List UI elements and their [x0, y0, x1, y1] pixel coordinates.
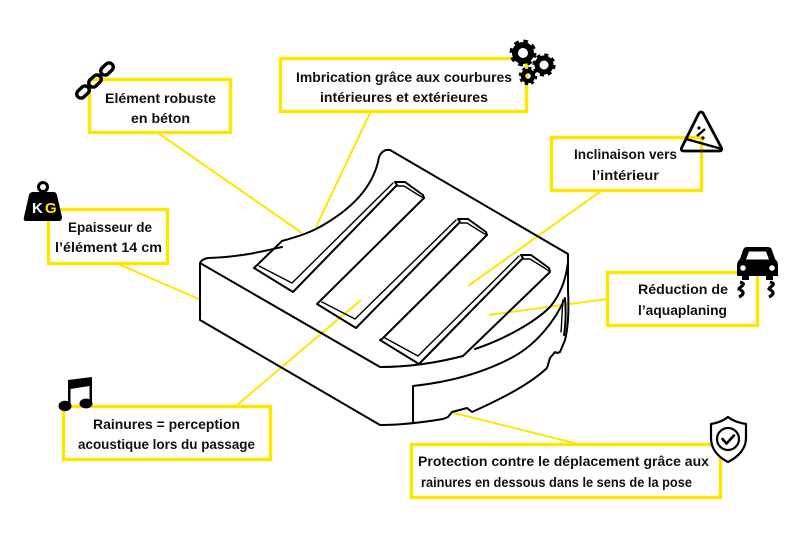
callout: reduction — [608, 272, 758, 326]
callout: imbrication: Imbrication grâce aux courbures — [296, 69, 512, 85]
connector lines — [118, 111, 607, 444]
callout: imbrication — [280, 58, 526, 112]
callout: reduction: l’aquaplaning — [638, 302, 727, 318]
callout: rainures: Rainures = perception — [93, 416, 240, 432]
block outline — [200, 150, 568, 425]
icon: shield check — [711, 417, 746, 462]
icon: gears — [512, 42, 554, 84]
callout: protection: Protection contre le déplacement grâce aux — [418, 453, 709, 469]
callout: imbrication: intérieures et extérieures — [320, 89, 488, 105]
icon: chain — [75, 61, 115, 100]
icon: weight KG — [24, 182, 62, 221]
callout: rainures: acoustique lors du passage — [78, 436, 255, 452]
callout: inclinaison: l’intérieur — [592, 167, 660, 183]
callout: inclinaison: Inclinaison vers — [574, 146, 677, 162]
callout: epaisseur: Epaisseur de — [68, 219, 152, 235]
callout: epaisseur — [48, 210, 168, 264]
callout: protection: rainures en dessous dans le sens de la pose — [421, 474, 692, 490]
icon: slope warning triangle — [681, 112, 722, 151]
callout: epaisseur: l’élément 14 cm — [55, 239, 162, 255]
callout: reduction: Réduction de — [638, 281, 728, 297]
icon: car aquaplaning — [737, 247, 778, 297]
groove 2 — [317, 198, 487, 328]
icon: weight KG: G — [45, 200, 57, 217]
callout: rainures — [64, 406, 270, 460]
top front edge — [200, 262, 568, 367]
icon: music notes — [58, 377, 92, 411]
groove 1 — [254, 182, 424, 292]
gear right — [534, 55, 554, 75]
concrete block drawing — [200, 150, 568, 425]
icon: weight KG: K — [32, 200, 43, 217]
callout: protection — [412, 444, 720, 498]
groove 3 — [380, 235, 550, 364]
callout: inclinaison — [552, 138, 702, 190]
chamfer edge — [413, 298, 566, 423]
callout: element robuste: Elément robuste — [105, 90, 216, 106]
callout: element robuste: en béton — [131, 110, 190, 126]
gear large — [512, 42, 534, 64]
gear small — [520, 68, 536, 84]
callout: element robuste — [90, 80, 230, 132]
